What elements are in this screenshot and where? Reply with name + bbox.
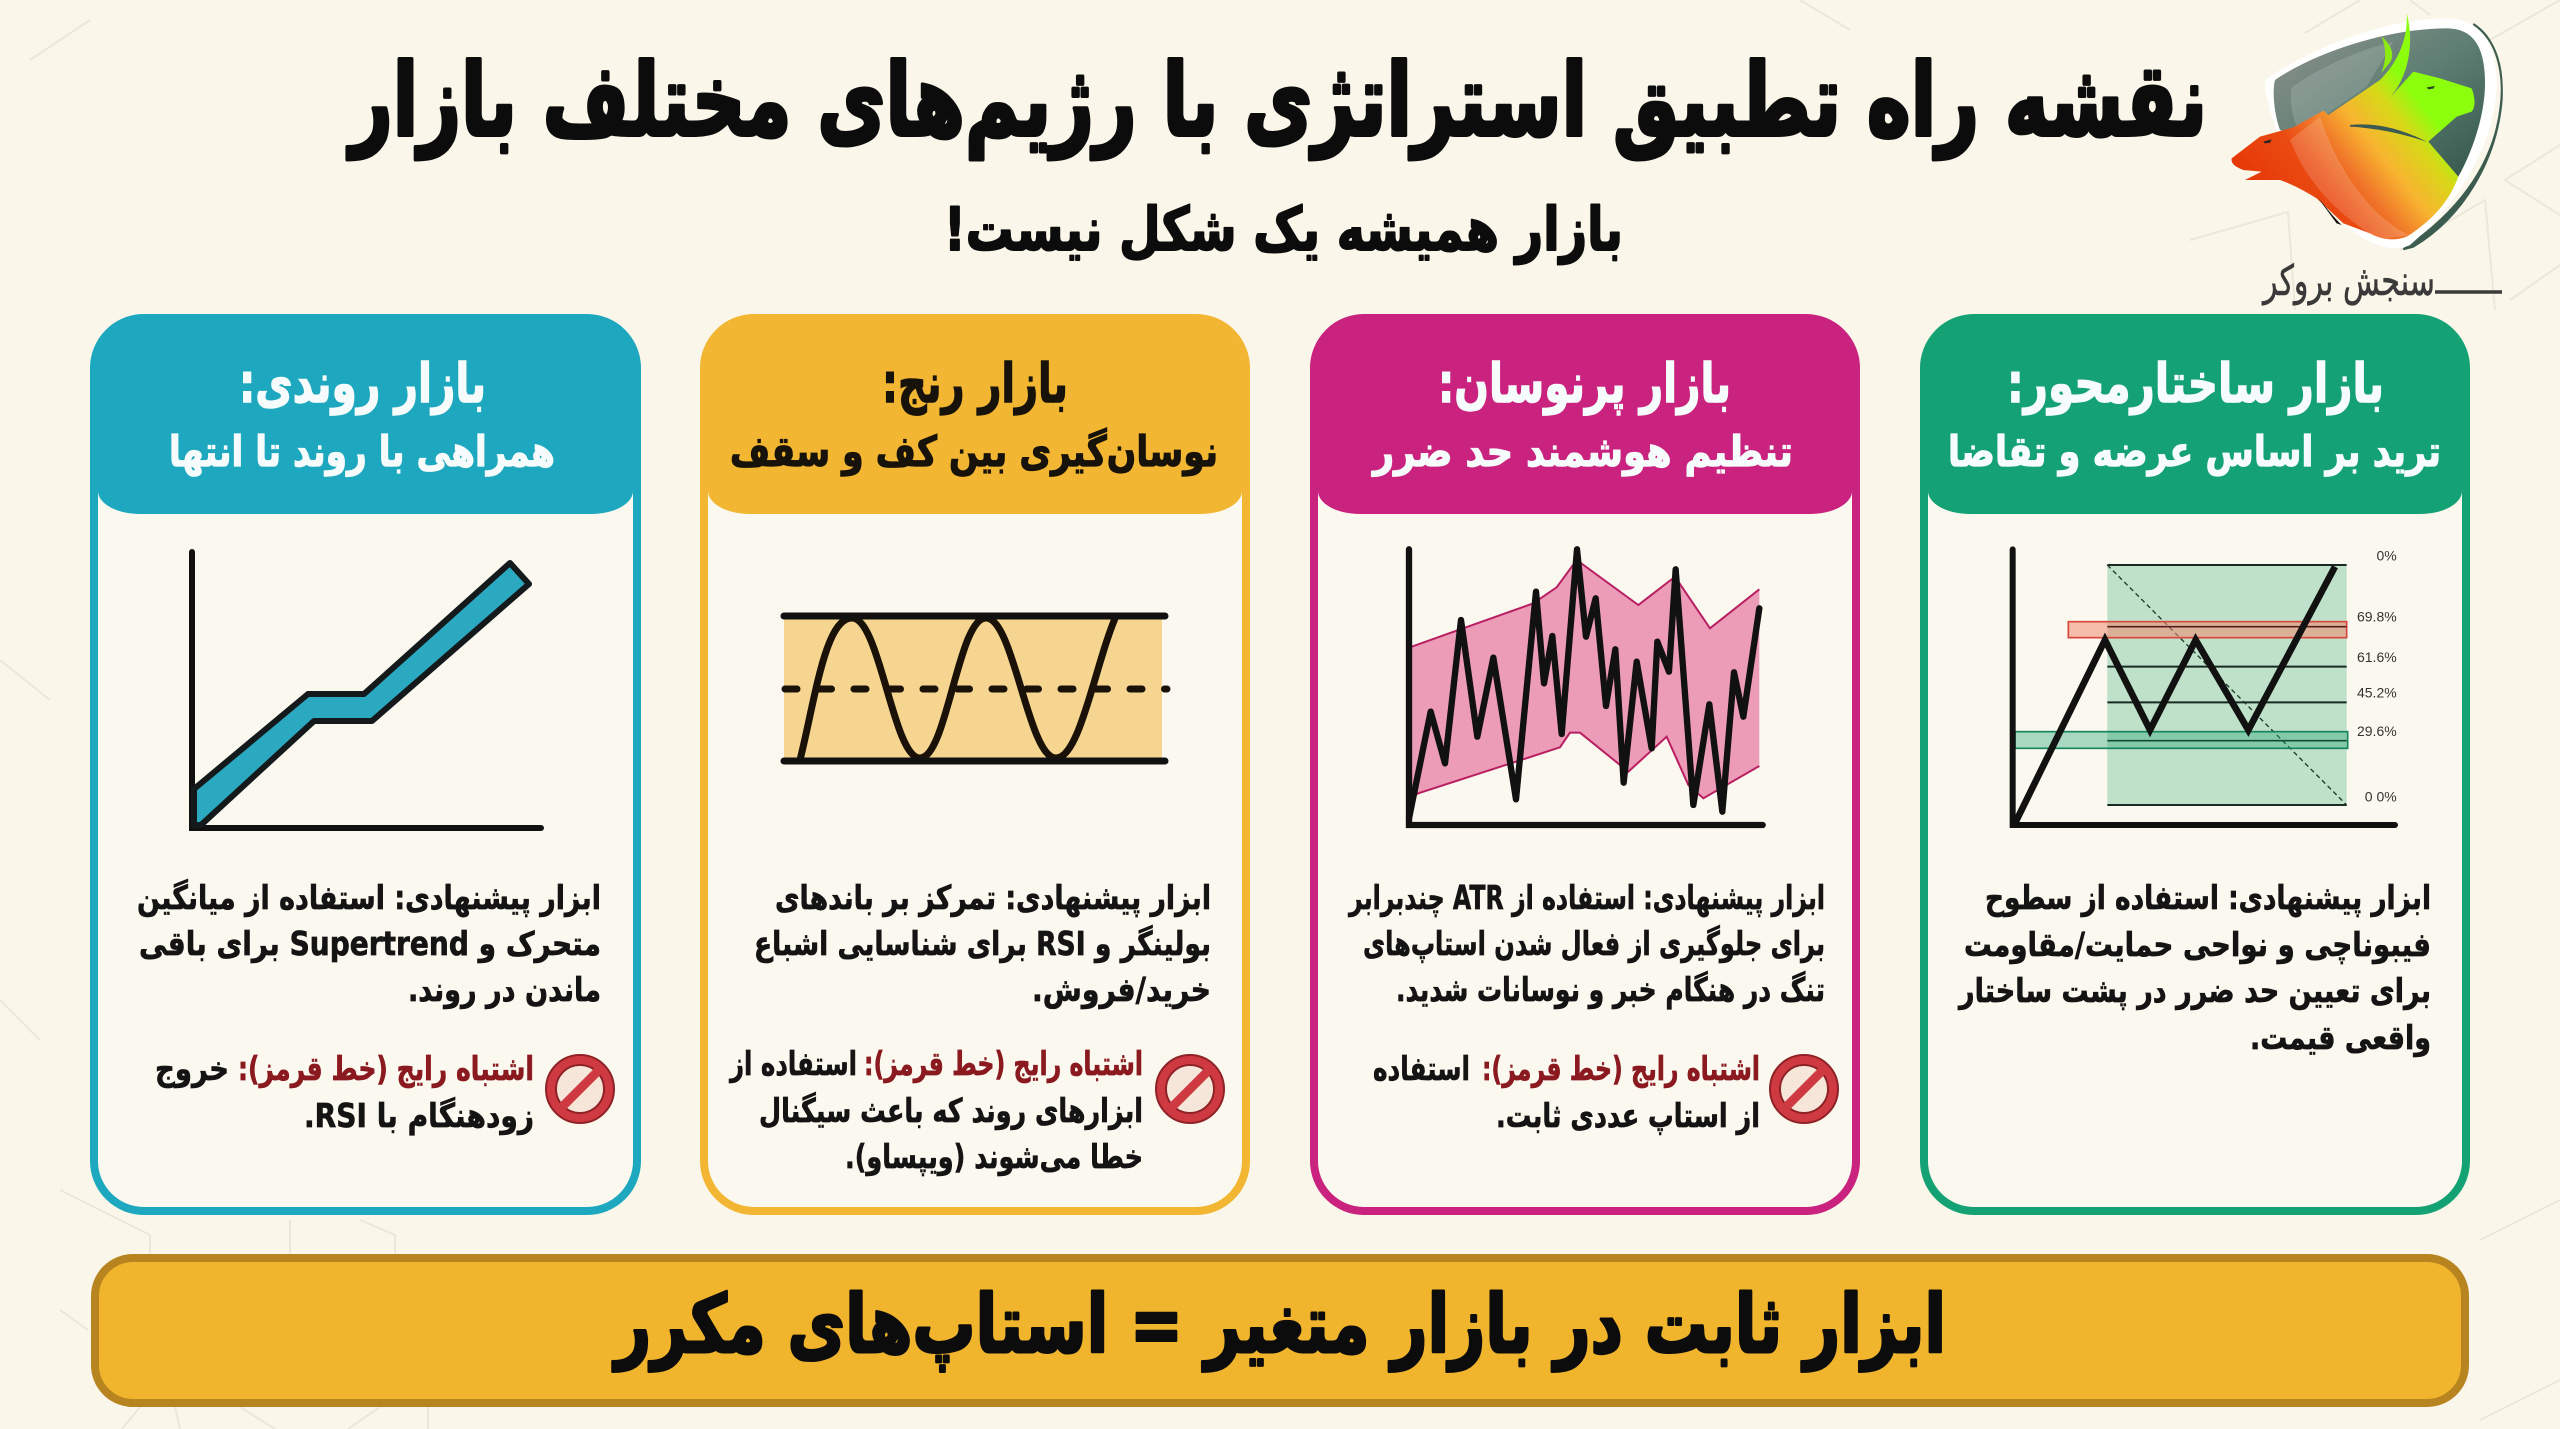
icon: prohibition sign: [1775, 1060, 1833, 1118]
recommended tool text: ابزار پیشنهادی: تمرکز بر باندهای: [775, 878, 1211, 918]
common mistake: خروج: [155, 1049, 229, 1089]
recommended tool text: ماندن در روند.: [408, 970, 601, 1010]
panel: volatile market: [1310, 314, 1860, 1211]
panel header: [1310, 314, 1860, 514]
chart: uptrend band: [192, 552, 541, 828]
common mistake: خطا می‌شوند (ویپساو).: [845, 1137, 1143, 1177]
recommended tool text: ابزار پیشنهادی: استفاده از ATR چندبرابر: [1348, 878, 1825, 918]
panel header: [700, 314, 1250, 514]
common mistake: از استاپ عددی ثابت.: [1496, 1096, 1760, 1135]
recommended tool text: برای تعیین حد ضرر در پشت ساختار: [1957, 971, 2431, 1011]
logo wordmark: سنجش بروکر: [2262, 256, 2435, 305]
panel header: تنظیم هوشمند حد ضرر: [1371, 427, 1793, 477]
recommended tool text: [1957, 878, 2431, 1058]
chart: Fibonacci levels with support and resistance: 61.6%: [2357, 649, 2397, 665]
recommended tool text: ابزار پیشنهادی: استفاده از میانگین: [137, 878, 601, 918]
recommended tool text: بولینگر و RSI برای شناسایی اشباع: [754, 924, 1211, 964]
common mistake: [1373, 1049, 1833, 1135]
panel header: ترید بر اساس عرضه و تقاضا: [1948, 427, 2441, 477]
chart: Fibonacci levels with support and resistance: 29.6%: [2357, 723, 2397, 739]
recommended tool text: برای جلوگیری از فعال شدن استاپ‌های: [1363, 924, 1825, 964]
panel header: بازار روندی:: [239, 352, 486, 415]
chart: range channel: [784, 616, 1167, 761]
subtitle: بازار همیشه یک شکل نیست!: [944, 195, 1623, 265]
common mistake: [155, 1049, 609, 1136]
common mistake: اشتباه رایج (خط قرمز):: [238, 1049, 534, 1089]
panel header: همراهی با روند تا انتها: [169, 427, 555, 477]
chart: Fibonacci levels with support and resistance: 69.8%: [2357, 608, 2397, 624]
recommended tool text: [1348, 878, 1825, 1010]
chart: Fibonacci levels with support and resistance: 0 0%: [2365, 788, 2397, 804]
panel frame: [1924, 318, 2466, 1211]
recommended tool text: [754, 878, 1211, 1010]
banner text: ابزار ثابت در بازار متغیر = استاپ‌های مکرر: [612, 1278, 1946, 1372]
recommended tool text: واقعی قیمت.: [2250, 1018, 2431, 1058]
panel header: [90, 314, 641, 514]
common mistake: ابزارهای روند که باعث سیگنال: [759, 1091, 1143, 1131]
chart: Fibonacci levels with support and resistance: 45.2%: [2357, 684, 2397, 700]
icon: bull and bear shield: [2232, 13, 2502, 249]
recommended tool text: ابزار پیشنهادی: استفاده از سطوح: [1985, 878, 2431, 918]
chart: Fibonacci levels with support and resistance: [2013, 548, 2397, 825]
common mistake: اشتباه رایج (خط قرمز):: [864, 1044, 1143, 1084]
recommended tool text: تنگ در هنگام خبر و نوسانات شدید.: [1396, 970, 1825, 1010]
common mistake: استفاده از: [729, 1044, 857, 1083]
recommended tool text: [137, 878, 601, 1010]
panel header: بازار رنج:: [882, 352, 1068, 415]
chart: Fibonacci levels with support and resistance: 0%: [2376, 548, 2397, 564]
logo: [2232, 13, 2502, 305]
panel frame: [704, 318, 1246, 1211]
panel: range market: [700, 314, 1250, 1211]
recommended tool text: متحرک و Supertrend برای باقی: [139, 924, 601, 964]
icon: prohibition sign: [1161, 1060, 1219, 1118]
panel header: بازار ساختارمحور:: [2007, 352, 2384, 415]
panel: trending market: [90, 314, 641, 1211]
panel header: بازار پرنوسان:: [1438, 352, 1731, 415]
common mistake: [729, 1044, 1219, 1177]
common mistake: استفاده: [1373, 1049, 1470, 1088]
panel frame: [1314, 318, 1856, 1211]
bottom banner: [95, 1258, 2465, 1403]
common mistake: زودهنگام با RSI.: [304, 1096, 534, 1136]
icon: prohibition sign: [551, 1060, 609, 1118]
common mistake: اشتباه رایج (خط قرمز):: [1482, 1049, 1760, 1089]
recommended tool text: فیبوناچی و نواحی حمایت/مقاومت: [1964, 925, 2431, 965]
panel header: [1920, 314, 2470, 514]
panel header: نوسان‌گیری بین کف و سقف: [730, 427, 1218, 477]
chart: volatility band: [1409, 549, 1763, 825]
panel: structure-based market: [1920, 314, 2470, 1211]
recommended tool text: خرید/فروش.: [1032, 970, 1211, 1010]
panel frame: [94, 318, 637, 1211]
